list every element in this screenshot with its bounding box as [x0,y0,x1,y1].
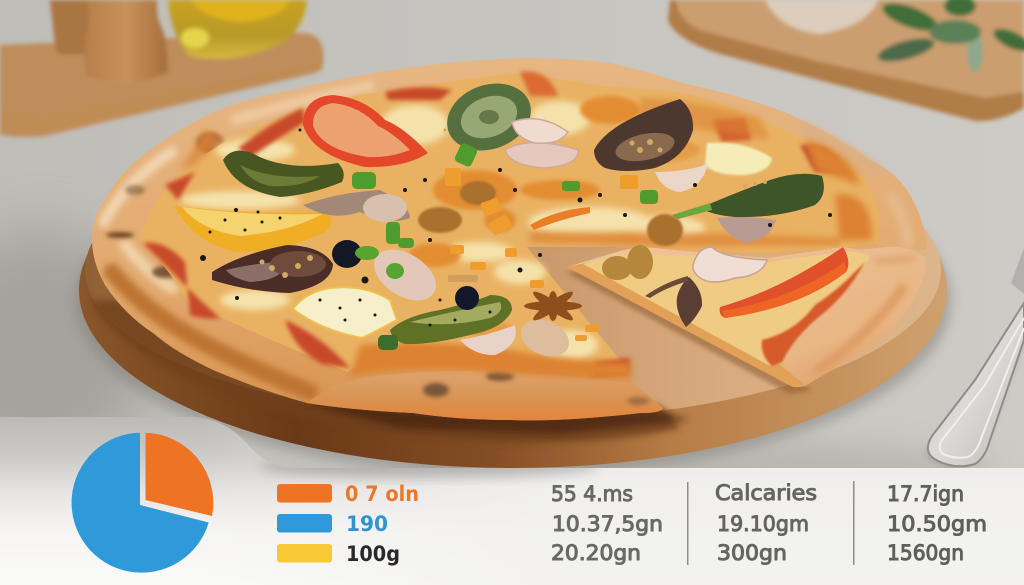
slice lower edge [567,262,805,387]
data column 3: 10.50gm [887,512,987,536]
dark wood under the left of the pizza [90,300,680,443]
legend label: blue: 190 [346,512,388,536]
slice cheese [583,251,870,366]
cream cheese patches [180,101,705,360]
slice sauce [762,262,865,366]
topping: herb bits [352,142,658,350]
orange cheese bits centre [409,96,700,338]
topping: meat crumbles [418,181,683,246]
knife and fork at right edge [925,248,1024,470]
crust browning bands [104,86,908,392]
legend swatch: blue [277,514,332,532]
data column 1 [551,482,663,565]
pie chart [72,433,213,573]
icon: pepper mill front [84,0,168,82]
topping: onion under pickle [717,217,776,243]
topping: star spice [524,288,582,324]
topping: orange carrot strip [530,207,590,230]
data column 2: 300gn [717,541,787,565]
baked orange band and right patches [180,98,872,378]
topping: leaves [355,246,404,279]
data column 1: 10.37,5gn [552,512,663,536]
front crust char marks [106,132,649,405]
knife blade [1011,248,1024,294]
topping: pickle left [223,151,344,197]
top-right wooden tray with garlic and herbs [668,0,1024,121]
slice onion [693,247,767,282]
crust [92,58,927,420]
legend swatch: yellow [277,544,332,562]
topping: mushroom left [212,245,333,293]
fork handle inner outline [940,318,1024,458]
data column 2 [715,481,817,565]
topping: mushroom dark top [594,99,693,171]
panel background [0,417,1024,585]
topping: onion bottom [460,325,516,355]
board top face [85,120,941,420]
topping: mozzarella slice [293,287,397,338]
topping: orange cubes [445,168,638,341]
slice crust [567,247,926,387]
divider [687,482,688,565]
top-left wooden tray with pepper mills and oil [0,0,323,137]
wooden serving board [75,112,951,475]
cheese base [140,73,879,373]
topping: tomato slice top [303,95,428,167]
legend [277,482,419,566]
bottom nutrition panel [0,417,1024,585]
data column 1: 55 4.ms [551,482,633,506]
slice meat pieces [602,245,653,280]
board shadow on panel [260,454,600,478]
data column 2: 19.10gm [717,512,809,536]
data column 3: 1560gn [887,541,964,565]
topping: olive small [455,286,479,310]
slice shadow [565,270,812,394]
icon: pepper mill back [50,0,90,55]
slice tomato [720,247,848,318]
sauce and baked patches [143,72,842,376]
topping: pickle right [672,174,824,219]
data column 3 [887,482,987,565]
topping: pickle bottom [390,295,512,344]
legend swatch: orange [277,484,332,502]
fork handle [928,303,1024,466]
legend label: orange: 0 7 oln [345,482,419,506]
slice mushroom strip [645,276,688,298]
topping: mushroom bottom [515,313,575,363]
icon: basil leaves [876,0,1024,72]
divider [853,481,854,565]
pie slice: orange [146,433,213,516]
shadow under front crust [300,402,690,434]
topping: mozzarella right [705,143,772,175]
pizza slice pulled out [565,245,926,394]
pie slice: blue [72,433,209,573]
slice crust shading [815,258,915,372]
topping: onion rings top [505,119,578,168]
pizza, main part [92,58,927,434]
icon: garlic bulb [765,0,878,34]
slice mushroom [677,277,702,327]
data column 1: 20.20gn [551,541,641,565]
topping: onion mid right [655,164,708,192]
icon: oil glass [168,0,307,59]
data column 3: 17.7ign [887,482,964,506]
pepper flecks [200,128,832,326]
topping: lemon slice [175,206,331,252]
topping: olive [332,240,362,268]
board side edge [79,112,947,468]
legend label: dark: 100g [346,542,400,566]
topping: green pepper top [438,72,540,162]
seed bits on dark toppings [260,128,767,278]
topping: onion slice centre [365,239,445,311]
front crust piece [307,371,663,420]
topping: mushroom centre [303,190,410,222]
data column 2: Calcaries [715,481,817,505]
